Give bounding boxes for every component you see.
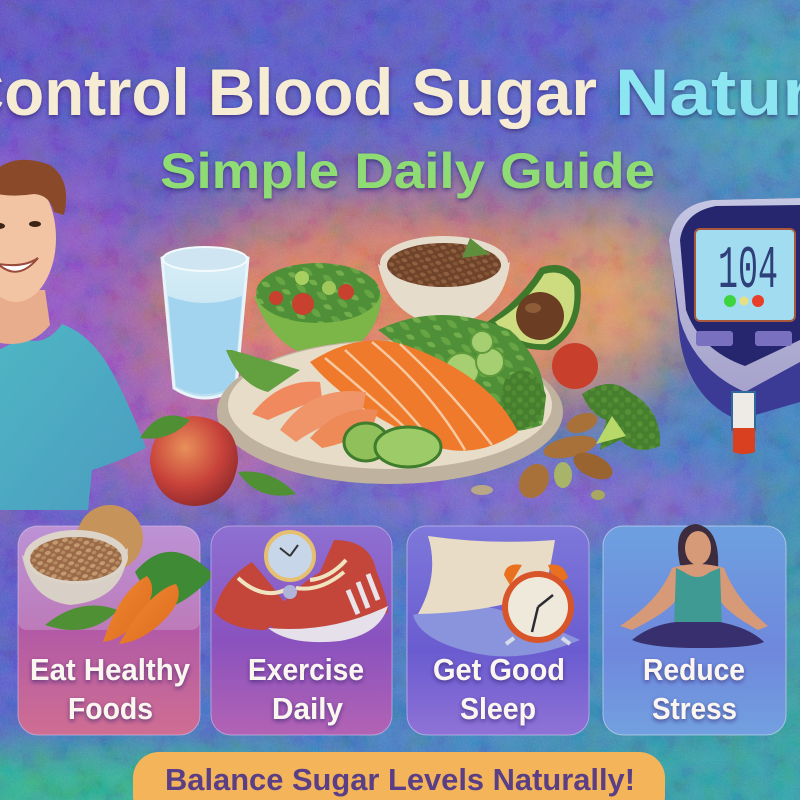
salad bowl xyxy=(254,263,382,358)
hair xyxy=(0,160,66,215)
pillow xyxy=(418,536,555,614)
card label xyxy=(643,652,745,726)
face xyxy=(0,174,56,302)
card label: Eat Healthy xyxy=(30,652,191,687)
card label: Daily xyxy=(272,691,344,726)
stopwatch xyxy=(266,532,314,599)
subtitle: Simple Daily Guide xyxy=(160,143,655,199)
sneakers xyxy=(214,540,388,642)
card label xyxy=(248,652,364,726)
callout banner xyxy=(133,752,665,800)
meter body xyxy=(670,198,800,420)
meter screen xyxy=(695,229,795,321)
tomato xyxy=(552,343,598,389)
salmon fillets xyxy=(310,340,518,451)
card label: Foods xyxy=(68,691,153,726)
panel: exercise daily xyxy=(211,526,392,735)
card label: Get Good xyxy=(433,652,565,687)
card label: Sleep xyxy=(460,691,536,726)
neck xyxy=(0,290,50,344)
smile xyxy=(0,258,38,272)
meter buttons xyxy=(696,331,792,346)
card label xyxy=(433,652,565,726)
lentil bowl xyxy=(378,236,510,328)
eyes xyxy=(0,221,41,229)
bowl of grains xyxy=(22,530,128,605)
plate of salmon and greens xyxy=(217,315,563,484)
broccoli xyxy=(582,384,660,450)
alarm clock xyxy=(502,564,574,644)
cucumber slices xyxy=(344,423,388,461)
test strip xyxy=(732,392,755,454)
cracker xyxy=(77,505,143,571)
card label: Reduce xyxy=(643,652,745,687)
card label: Stress xyxy=(652,691,737,726)
avocado xyxy=(487,265,581,350)
water glass xyxy=(162,247,248,398)
carrots and leaves xyxy=(45,552,214,644)
panel: get good sleep xyxy=(407,526,589,735)
indicator lights xyxy=(724,295,764,307)
callout banner: Balance Sugar Levels Naturally! xyxy=(165,762,635,797)
shirt xyxy=(0,324,146,510)
apple xyxy=(140,415,296,506)
panel: eat healthy foods xyxy=(18,505,214,735)
blanket xyxy=(413,606,580,656)
glucose meter xyxy=(669,198,800,454)
person illustration xyxy=(0,160,146,510)
panel: reduce stress xyxy=(603,524,786,735)
upper pale panel xyxy=(18,526,200,630)
nuts and seeds xyxy=(471,409,617,504)
meditating woman xyxy=(620,524,768,648)
greens xyxy=(378,315,545,431)
card label xyxy=(30,652,191,726)
card label: Exercise xyxy=(248,652,364,687)
